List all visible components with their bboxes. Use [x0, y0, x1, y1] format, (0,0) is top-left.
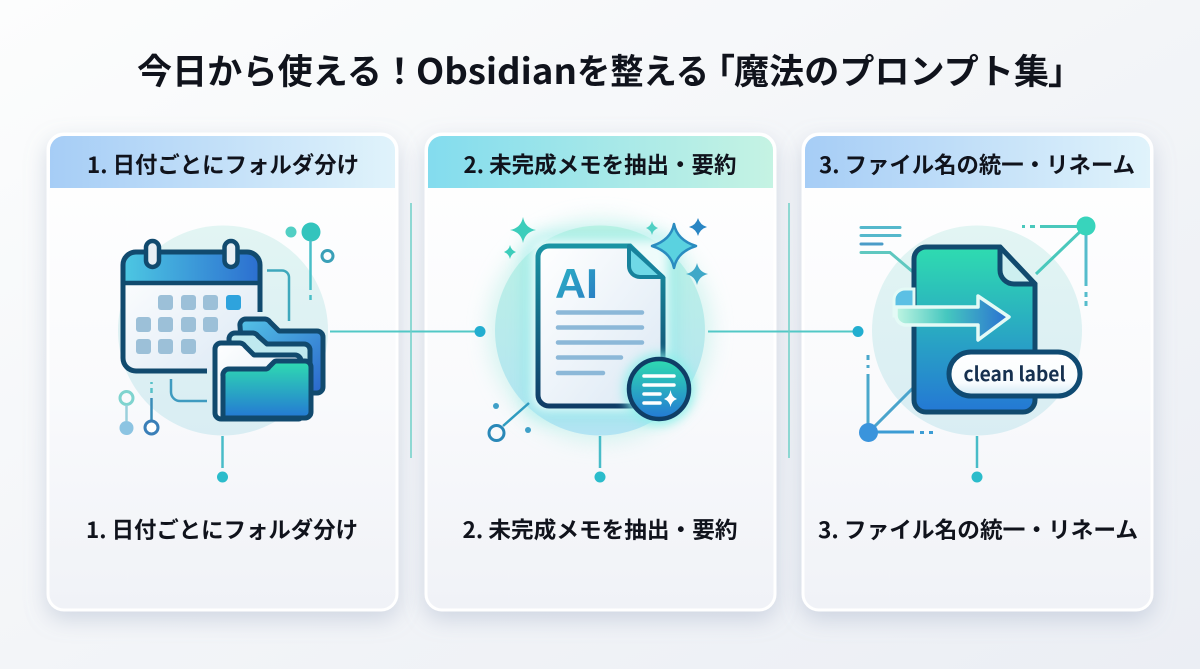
AI label: AI	[555, 260, 598, 307]
icon: document	[538, 246, 663, 406]
card 3 background	[803, 134, 1152, 610]
icon: file	[914, 247, 1035, 412]
title	[137, 44, 1083, 95]
network bottom left	[859, 355, 933, 442]
halo circle	[118, 226, 328, 436]
title: Obsidian	[416, 44, 577, 95]
pill text: clean label	[964, 358, 1066, 387]
arrow	[894, 289, 1009, 340]
card 1 background	[48, 134, 397, 610]
card 1 header band	[50, 136, 395, 188]
title: を整える	[577, 44, 709, 95]
title: 「	[700, 44, 735, 95]
card 2 heading: 2. 未完成メモを抽出・要約	[464, 148, 736, 180]
connector: step 1 to step 2	[330, 203, 486, 458]
icon: calendar	[123, 241, 260, 371]
card 2 header band	[428, 136, 773, 188]
icon: summary badge	[623, 353, 695, 425]
card 3 heading: 3. ファイル名の統一・リネーム	[819, 148, 1135, 180]
sparkle cluster	[504, 217, 708, 285]
title: 今日から使える！	[137, 44, 417, 95]
document text lines	[558, 312, 642, 373]
title: 」	[1048, 44, 1083, 95]
decorative nodes top right	[286, 222, 333, 300]
icon: folder stack	[215, 319, 323, 419]
glowing halo	[488, 218, 712, 442]
panel: step 2 extract and summarize	[426, 134, 775, 610]
title: 魔法のプロンプト集	[734, 44, 1049, 95]
halo circle	[872, 226, 1082, 436]
card 1 heading: 1. 日付ごとにフォルダ分け	[87, 148, 359, 180]
network top right	[1022, 216, 1096, 306]
card 1 caption: 1. 日付ごとにフォルダ分け	[86, 513, 358, 545]
decorative nodes lower left	[489, 403, 531, 440]
illustration: calendar and folders	[118, 222, 333, 482]
panel: step 1 folders	[48, 134, 397, 610]
decorative nodes lower left	[120, 382, 158, 435]
illustration: file rename	[859, 216, 1096, 482]
stem with node below circle	[594, 436, 606, 482]
stem with node below circle	[972, 436, 982, 482]
card 3 caption: 3. ファイル名の統一・リネーム	[818, 513, 1138, 545]
card 3 header band	[805, 136, 1150, 188]
card 2 caption: 2. 未完成メモを抽出・要約	[462, 513, 738, 545]
text lines top left	[861, 228, 913, 272]
calendar day grid	[136, 295, 241, 354]
clean label pill	[949, 352, 1080, 396]
card 2 background	[426, 134, 775, 610]
panel: step 3 rename	[803, 134, 1152, 610]
stem with node below circle	[217, 436, 228, 482]
connector lines	[267, 270, 289, 321]
illustration: AI document	[488, 217, 712, 482]
connector: step 2 to step 3	[708, 203, 864, 458]
